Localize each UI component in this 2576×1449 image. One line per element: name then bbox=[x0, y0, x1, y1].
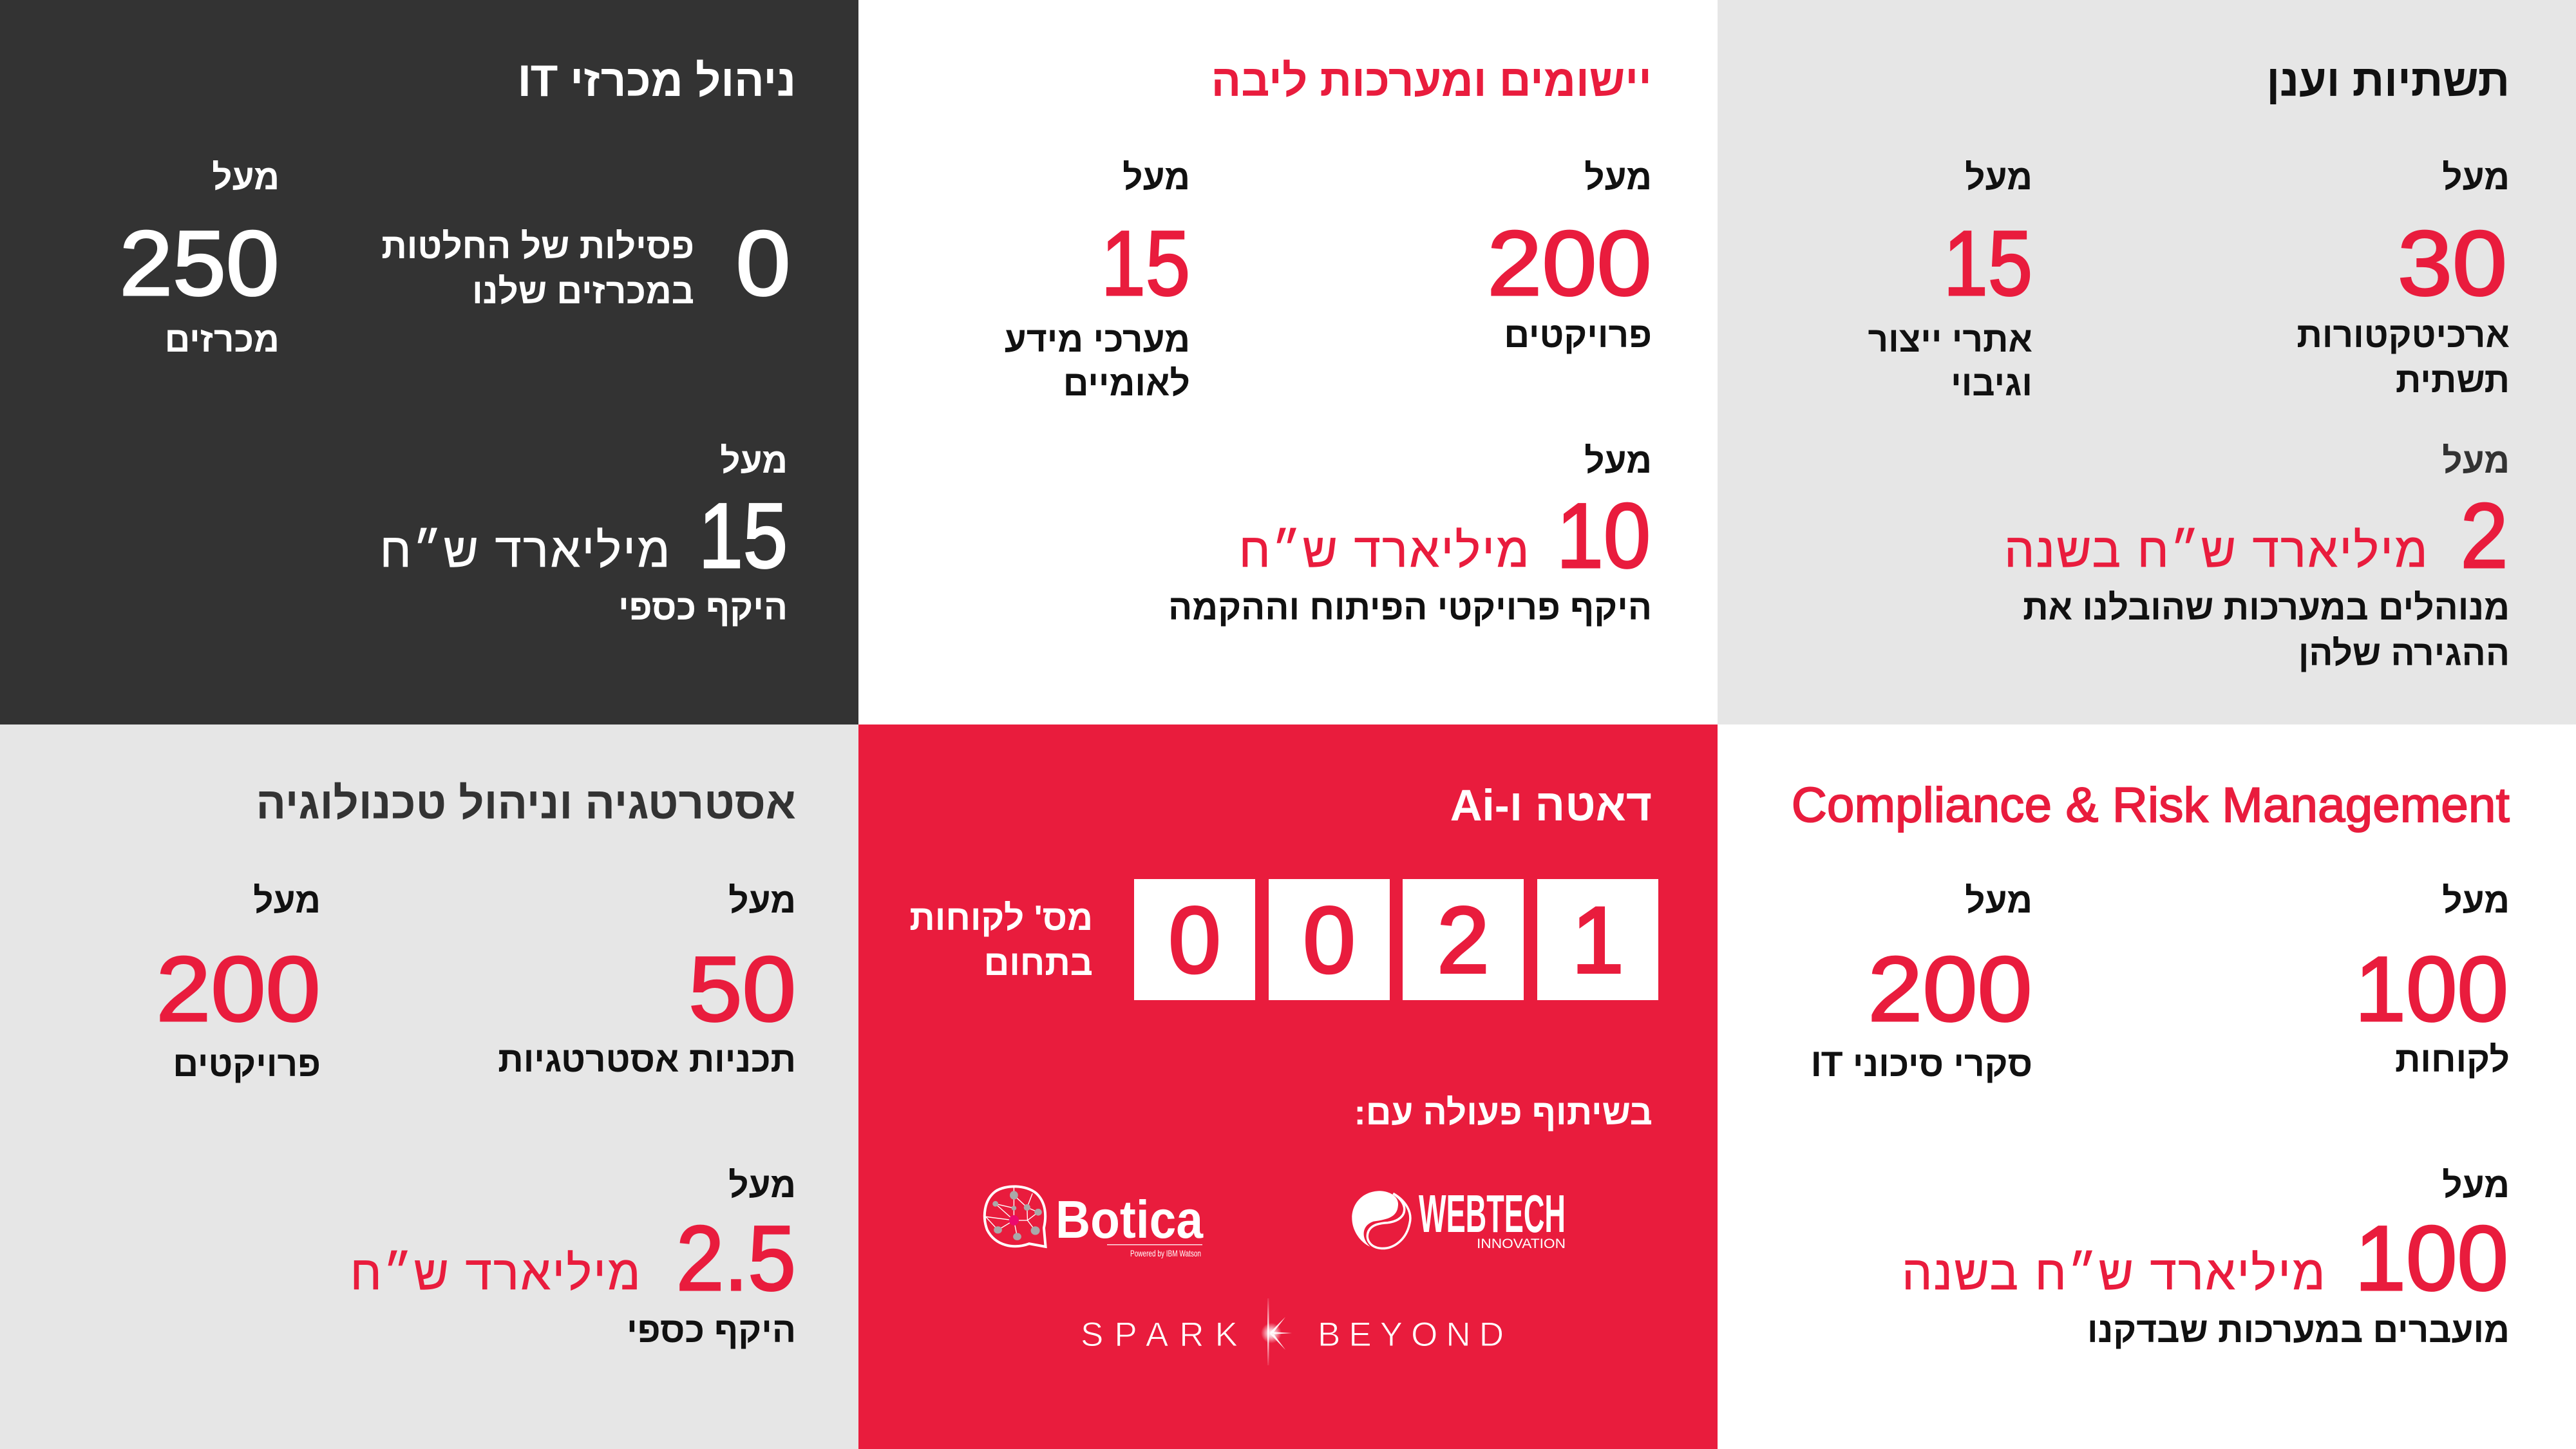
stat: 100 customers: 100 bbox=[2354, 938, 2508, 1041]
stat: 15 sites: 15 bbox=[1944, 213, 2032, 315]
stat: 30 architectures: ארכיטקטורות bbox=[2297, 315, 2510, 355]
panel: infrastructure and cloud bbox=[1718, 0, 2576, 724]
stat: 250 tenders: מכרזים bbox=[165, 319, 279, 359]
stat: 100 billion bbox=[1902, 1165, 2510, 1350]
stat: 2.5 billion bbox=[350, 1165, 796, 1350]
panel: data and AI bbox=[858, 724, 1718, 1449]
stat: 2.5 billion: מעל bbox=[728, 1165, 796, 1205]
digit tile bbox=[1537, 879, 1658, 1000]
stat: 100 customers: לקוחות bbox=[2395, 1039, 2510, 1079]
stat: 10 billion bbox=[1168, 440, 1652, 627]
partner logos bbox=[983, 1184, 1566, 1365]
stat: 100 customers: מעל bbox=[2442, 880, 2510, 920]
stat: 15 national systems: 15 bbox=[1101, 213, 1190, 315]
stat: 15 national systems: לאומיים bbox=[1063, 363, 1190, 403]
stat: 15 sites: אתרי ייצור bbox=[1868, 319, 2032, 359]
heading: תשתיות וענן bbox=[2266, 56, 2510, 106]
stat: 10 billion: מיליארד ש״ח bbox=[1239, 524, 1531, 577]
stat: 50 strategic plans: מעל bbox=[728, 880, 796, 920]
stat: 200 projects: פרויקטים bbox=[1504, 315, 1652, 355]
heading: יישומים ומערכות ליבה bbox=[1211, 56, 1652, 106]
stat: 200 projects: 200 bbox=[1488, 213, 1652, 315]
stat: 50 strategic plans: 50 bbox=[688, 938, 796, 1041]
stat: 250 tenders: מעל bbox=[212, 157, 279, 197]
stat: 15 sites bbox=[1868, 157, 2032, 403]
digit tile: 1 bbox=[1571, 887, 1624, 992]
stat: 250 tenders: 250 bbox=[120, 213, 279, 315]
stat: 30 architectures: 30 bbox=[2398, 213, 2507, 315]
digit tile: 0 bbox=[1168, 887, 1221, 992]
stat: 2 billion: 2 bbox=[2461, 485, 2508, 587]
stat: 200 projects bbox=[156, 880, 321, 1084]
stat: 0 disqualifications bbox=[381, 213, 791, 315]
digit tile: 2 bbox=[1437, 887, 1490, 992]
stat: 200 projects: מעל bbox=[253, 880, 321, 920]
stat: 15 billion: מעל bbox=[720, 440, 788, 480]
stat: 15 national systems: מעל bbox=[1122, 157, 1190, 197]
stat: 30 architectures: מעל bbox=[2442, 157, 2510, 197]
logo: Webtech Innovation bbox=[1352, 1184, 1566, 1251]
counter caption: בתחום bbox=[984, 943, 1093, 983]
logo: Botica bbox=[985, 1186, 1204, 1258]
stat: 200 projects: מעל bbox=[1584, 157, 1652, 197]
stat: 30 architectures bbox=[2297, 157, 2510, 400]
digit tile: 0 bbox=[1303, 887, 1356, 992]
stat: 200 IT risk surveys bbox=[1812, 880, 2032, 1084]
stat: 15 billion bbox=[380, 440, 788, 627]
stat: 10 billion: 10 bbox=[1557, 485, 1651, 587]
stat: 100 billion: מועברים במערכות שבדקנו bbox=[2087, 1310, 2510, 1350]
stat: 100 billion: מעל bbox=[2442, 1165, 2510, 1205]
stat: 2 billion: מעל bbox=[2442, 440, 2510, 480]
logo: Spark Beyond: SPARK bbox=[1081, 1316, 1238, 1354]
partners caption: בשיתוף פעולה עם: bbox=[1354, 1092, 1653, 1132]
stat: 15 sites: מעל bbox=[1965, 157, 2032, 197]
logo: Botica: Powered by IBM Watson bbox=[1130, 1248, 1201, 1258]
digit tile bbox=[1269, 879, 1390, 1000]
heading: דאטה ו-Ai bbox=[1450, 781, 1652, 830]
stat: 0 disqualifications: פסילות של החלטות bbox=[381, 226, 694, 266]
stat: 0 disqualifications: במכרזים שלנו bbox=[472, 271, 694, 311]
stat: 10 billion: מעל bbox=[1584, 440, 1652, 480]
counter caption: מס' לקוחות bbox=[909, 898, 1093, 938]
panel: compliance and risk management bbox=[1718, 724, 2576, 1449]
stat: 15 billion: 15 bbox=[699, 485, 788, 587]
logo: Spark Beyond bbox=[1081, 1298, 1504, 1365]
stat: 2 billion: מנוהלים במערכות שהובלנו את bbox=[2023, 587, 2510, 627]
heading: ניהול מכרזי IT bbox=[518, 56, 796, 106]
counter: number of customers 1200 bbox=[1134, 879, 1658, 1000]
stat: 200 projects bbox=[1488, 157, 1652, 355]
stat: 200 projects: פרויקטים bbox=[173, 1044, 321, 1084]
logo: Webtech Innovation: INNOVATION bbox=[1477, 1236, 1566, 1251]
heading: אסטרטגיה וניהול טכנולוגיה bbox=[256, 779, 796, 828]
counter caption bbox=[909, 898, 1093, 983]
stat: 15 sites: וגיבוי bbox=[1951, 363, 2032, 403]
panel: central IT tenders bbox=[0, 0, 858, 724]
stat: 100 billion: 100 bbox=[2354, 1208, 2508, 1310]
stat: 10 billion: היקף פרויקטי הפיתוח וההקמה bbox=[1168, 587, 1652, 627]
stat: 50 strategic plans: תכניות אסטרטגיות bbox=[498, 1039, 796, 1079]
stat: 50 strategic plans bbox=[498, 880, 796, 1079]
stat: 2.5 billion: 2.5 bbox=[676, 1208, 796, 1310]
stat: 200 IT risk surveys: 200 bbox=[1868, 938, 2032, 1041]
stat: 200 projects: 200 bbox=[156, 938, 321, 1041]
stat: 2 billion bbox=[2004, 440, 2510, 673]
stat: 100 billion: מיליארד ש״ח בשנה bbox=[1902, 1246, 2327, 1300]
stat: 250 tenders bbox=[120, 157, 279, 359]
stat: 15 billion: היקף כספי bbox=[618, 587, 788, 627]
stat: 30 architectures: תשתית bbox=[2396, 360, 2510, 400]
heading: Compliance & Risk Management bbox=[1792, 778, 2510, 833]
stat: 200 IT risk surveys: סקרי סיכוני IT bbox=[1812, 1044, 2032, 1084]
stat: 2 billion: מיליארד ש״ח בשנה bbox=[2004, 524, 2429, 577]
stat: 15 billion: מיליארד ש״ח bbox=[380, 524, 672, 577]
stat: 200 IT risk surveys: מעל bbox=[1965, 880, 2032, 920]
stat: 2 billion: ההגירה שלהן bbox=[2298, 633, 2510, 673]
stat: 15 national systems bbox=[1005, 157, 1190, 403]
stat: 15 national systems: מערכי מידע bbox=[1005, 319, 1190, 359]
stat: 2.5 billion: היקף כספי bbox=[627, 1310, 796, 1350]
panel: strategy and technology management bbox=[0, 724, 858, 1449]
logo: Botica: Botica bbox=[1056, 1189, 1204, 1249]
panel: applications and core systems bbox=[858, 0, 1718, 724]
stat: 100 customers bbox=[2354, 880, 2510, 1079]
logo: Spark Beyond: BEYOND bbox=[1318, 1316, 1504, 1354]
stat: 2.5 billion: מיליארד ש״ח bbox=[350, 1246, 642, 1300]
stat: 0 disqualifications: 0 bbox=[736, 213, 791, 315]
digit tile bbox=[1403, 879, 1524, 1000]
digit tile bbox=[1134, 879, 1255, 1000]
